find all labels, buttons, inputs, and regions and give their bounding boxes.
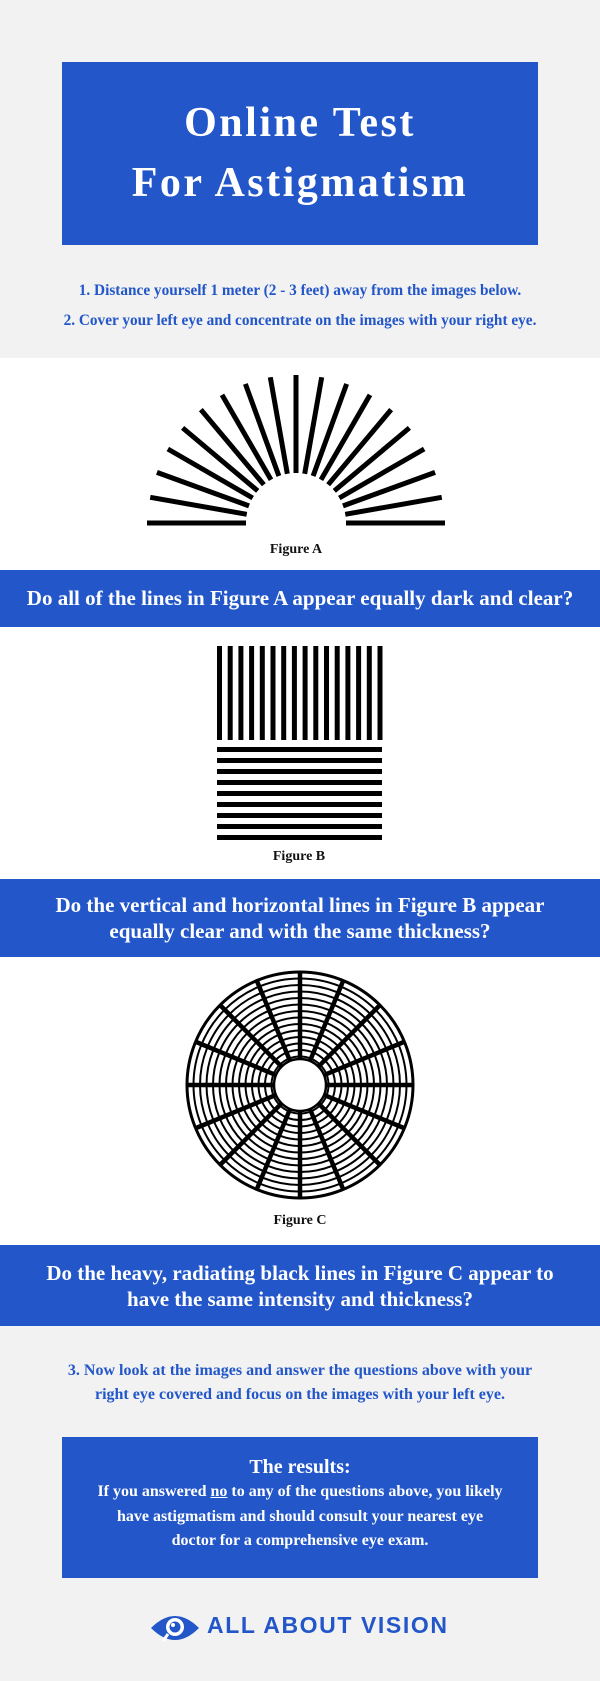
results text: doctor for a comprehensive eye exam. bbox=[172, 1532, 428, 1549]
figure B lines bbox=[217, 646, 382, 840]
title box bbox=[62, 62, 538, 245]
question A band: Do all of the lines in Figure A appear equally dark and clear? bbox=[27, 586, 573, 610]
panel: figure C bbox=[0, 957, 600, 1245]
results heading: The results: bbox=[249, 1456, 351, 1478]
title box: For Astigmatism bbox=[132, 160, 468, 206]
results text: have astigmatism and should consult your nearest eye bbox=[117, 1508, 483, 1524]
figure A fan chart bbox=[147, 375, 445, 526]
step 3 text: 3. Now look at the images and answer the questions above with your bbox=[68, 1362, 532, 1379]
step 3 text: right eye covered and focus on the images with your left eye. bbox=[95, 1386, 505, 1403]
instructions: 1. Distance yourself 1 meter (2 - 3 feet) away from the images below. bbox=[79, 282, 521, 299]
label: Figure C: Figure C bbox=[273, 1213, 326, 1228]
question C band bbox=[0, 1245, 600, 1326]
question B band: equally clear and with the same thickness? bbox=[109, 919, 491, 943]
results box bbox=[62, 1437, 538, 1578]
question C band: have the same intensity and thickness? bbox=[127, 1287, 473, 1311]
question B band bbox=[0, 879, 600, 957]
icon: eye bbox=[151, 1616, 199, 1642]
figure C target bbox=[186, 970, 414, 1200]
logo text: ALL ABOUT VISION bbox=[207, 1612, 449, 1638]
results text bbox=[97, 1483, 503, 1549]
instructions: 2. Cover your left eye and concentrate on the images with your right eye. bbox=[64, 312, 536, 329]
question B band: Do the vertical and horizontal lines in Figure B appear bbox=[55, 893, 545, 917]
question C band: Do the heavy, radiating black lines in Figure C appear to bbox=[46, 1261, 554, 1285]
label: Figure A: Figure A bbox=[270, 542, 322, 557]
label: Figure B: Figure B bbox=[273, 849, 325, 864]
panel: figure A bbox=[0, 358, 600, 570]
title box: Online Test bbox=[184, 100, 416, 146]
panel: figure B bbox=[0, 627, 600, 879]
results text: If you answered no to any of the questions above, you likely bbox=[97, 1483, 503, 1500]
step 3 text bbox=[68, 1362, 532, 1403]
question A band bbox=[0, 570, 600, 627]
logo: All About Vision bbox=[151, 1612, 449, 1642]
instructions bbox=[64, 282, 536, 329]
